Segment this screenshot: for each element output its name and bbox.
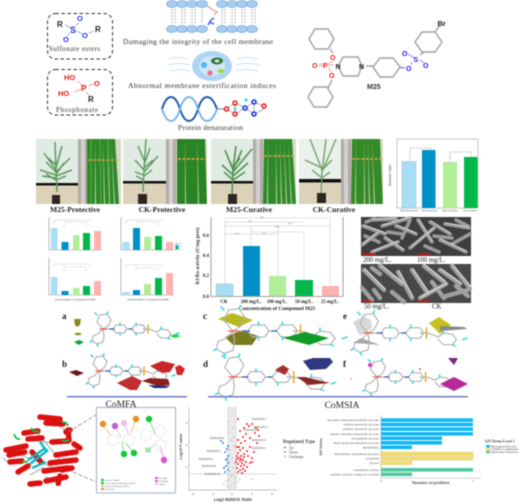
axis tick labels: 50 mg/L. xyxy=(295,300,313,305)
phosphonate box: R xyxy=(88,95,94,104)
bar chart: curative enzyme activity: *** xyxy=(287,222,293,226)
sulfonate esters box: O xyxy=(63,35,69,44)
bar chart: disease index: M25-Curative xyxy=(442,210,459,212)
protein labels: RAPGEFL10 xyxy=(205,473,221,476)
GO legend xyxy=(485,440,519,454)
axis labels: 6 xyxy=(186,421,188,425)
interaction legend: Conventional Hydrogen Bond xyxy=(105,482,136,485)
axis tick labels xyxy=(220,300,339,305)
interaction legend: Alkyl xyxy=(159,483,165,486)
axis tick labels: 25 mg/L. xyxy=(321,300,339,305)
sulfonate esters box xyxy=(48,14,112,59)
x axis title: Concentration of Compound M25 xyxy=(239,306,316,312)
panel: M25-Curative photos xyxy=(211,139,296,204)
protein labels: RAPGEFL8 xyxy=(199,458,213,461)
interaction legend xyxy=(101,477,169,491)
chemical structure: M25: O xyxy=(330,55,336,62)
protein labels: RAPGEFL1 xyxy=(252,418,266,421)
DNA and protein illustration xyxy=(162,97,266,121)
bar chart: disease index: CK-Curative xyxy=(463,210,478,212)
bar chart: curative enzyme activity: 0.2 xyxy=(203,274,210,279)
panel: CoMSIA field f xyxy=(343,358,468,395)
GO legend: Cellular Component xyxy=(491,447,519,451)
leaf photo xyxy=(166,139,207,204)
protein labels: RAPGEFL9 xyxy=(202,465,216,468)
chemical structure: M25: N xyxy=(359,64,364,71)
cellular component bars xyxy=(381,452,473,465)
label: cell membrane: Damaging the integrity of the cell membrane xyxy=(123,37,274,46)
chemical structure: M25: N xyxy=(336,64,341,71)
panel: CoMSIA field d xyxy=(203,354,336,400)
bar chart: enzyme activity 1 xyxy=(49,217,102,250)
label c: c xyxy=(203,311,207,321)
term labels: catalytic activity, acting on a protein xyxy=(330,472,379,477)
divider: CoMFA xyxy=(67,396,187,398)
term labels: organic substance metabolic process xyxy=(330,432,380,436)
bar chart: enzyme activity 2 xyxy=(121,217,181,250)
bar chart: curative enzyme activity xyxy=(196,215,343,312)
plant photo xyxy=(36,139,78,204)
volcano plot: Log2 M25/CK Ratio xyxy=(214,497,253,502)
caption: CK-Curative xyxy=(313,205,356,214)
bar chart: curative enzyme activity: *** xyxy=(234,232,240,236)
interaction legend: Carbon Hydrogen Bond xyxy=(105,485,130,488)
heading: CoMSIA: CoMSIA xyxy=(325,401,360,411)
axis labels: 0 xyxy=(231,492,233,496)
chemical structure: M25: Br xyxy=(438,19,446,28)
term labels: methylation xyxy=(363,445,379,449)
bar chart: curative enzyme activity: ns xyxy=(248,219,252,223)
protein labels: RAPGEFL7 xyxy=(207,450,221,453)
volcano legend: Unchange xyxy=(289,455,304,459)
GO enrichment bar chart: Number of proteins xyxy=(413,480,450,485)
bar chart: curative enzyme activity: 0.4 xyxy=(203,254,210,259)
caption: CK-Protective xyxy=(139,205,186,214)
label: protein denaturation: Protein denaturation xyxy=(178,123,243,132)
leaf photo xyxy=(78,139,121,204)
axis labels: 3 xyxy=(251,492,253,496)
volcano plot xyxy=(179,407,315,502)
membrane illustration xyxy=(166,0,258,33)
term labels: small molecule metabolic process xyxy=(333,441,380,445)
SEM bottom row xyxy=(361,264,471,303)
bar chart: curative enzyme activity: *** xyxy=(274,225,280,229)
term labels: intracellular anatomical structure xyxy=(334,452,379,456)
protein labels: RAPGEFL5 xyxy=(252,447,266,450)
bar chart: enzyme activity 3 xyxy=(49,258,102,302)
panel: CoMSIA field e xyxy=(343,311,467,355)
protein labels xyxy=(199,418,268,476)
chemical structure: M25 xyxy=(308,19,446,107)
label e: e xyxy=(343,311,347,321)
divider: CoMSIA xyxy=(208,396,468,398)
GO axis labels: 0 xyxy=(380,479,382,483)
GO legend: GO Terms Level 1 xyxy=(485,440,515,444)
axis labels: 4 xyxy=(186,443,188,447)
term labels: cytosol xyxy=(369,461,379,465)
GO axis labels xyxy=(380,479,474,483)
bar chart: disease index: Disease index xyxy=(388,164,392,186)
panel: M25-Protective photos xyxy=(36,139,121,204)
volcano legend: Up xyxy=(289,446,294,450)
plant photo xyxy=(211,139,253,204)
downregulated points xyxy=(221,441,228,472)
bar chart: enzyme activity 4 xyxy=(121,258,174,302)
panel: CK-Protective photos xyxy=(123,139,207,204)
label d: d xyxy=(203,359,208,369)
biological process bars xyxy=(381,418,473,449)
bar chart: disease index: CK-Protective xyxy=(421,210,438,212)
SEM top row xyxy=(361,217,471,256)
axis labels: -6 xyxy=(192,492,195,496)
SEM label 100: 100 mg/L. xyxy=(417,257,446,264)
term labels xyxy=(327,418,380,477)
sulfonate esters box: R xyxy=(95,25,101,34)
panel: CoMSIA field c xyxy=(203,306,347,356)
upregulated points xyxy=(236,419,259,473)
bar chart: disease index xyxy=(388,139,478,212)
heading: CoMFA: CoMFA xyxy=(106,400,137,410)
leaf photo xyxy=(341,139,383,204)
SEM label CK: CK xyxy=(432,304,442,310)
bar chart: enzyme activity 4: Concentration of Compound M25 xyxy=(127,298,169,302)
phosphonate box: HO xyxy=(58,89,69,98)
bar chart: curative enzyme activity: 0.0 xyxy=(203,295,210,300)
protein labels: RAPGEFL6 xyxy=(210,437,224,440)
protein labels: RAPGEFL4 xyxy=(252,439,266,442)
GO legend: Biological Process xyxy=(491,444,517,448)
label a: a xyxy=(62,311,67,321)
GO axis labels: 2 xyxy=(441,479,443,483)
interaction legend: van der Waals xyxy=(105,479,119,482)
volcano legend: Down xyxy=(289,450,298,454)
chemical structure: M25: O xyxy=(406,66,412,73)
axis labels xyxy=(186,421,273,496)
interaction legend: Pi-Alkyl xyxy=(159,477,168,480)
chemical structure: M25: O xyxy=(423,63,429,70)
panel: CoMFA steric field a xyxy=(62,311,181,346)
interaction legend: Pi-Sigma xyxy=(159,480,169,483)
label b: b xyxy=(62,359,67,369)
SEM label 200: 200 mg/L. xyxy=(363,257,392,264)
axis tick labels: CK xyxy=(220,300,228,305)
axis labels: 6 xyxy=(271,492,273,496)
GO enrichment bar chart: GO terms xyxy=(319,438,323,456)
bar chart: curative enzyme activity: *** xyxy=(261,232,267,236)
axis labels: 2 xyxy=(186,465,188,469)
axis labels: -3 xyxy=(212,492,215,496)
chemical structure: M25: P xyxy=(323,63,328,70)
GO enrichment bar chart xyxy=(319,415,519,485)
panel: SEM micrographs xyxy=(361,217,471,310)
compound name: M25 xyxy=(367,84,381,91)
protein labels: RAPGEFL2 xyxy=(254,426,268,429)
axis tick labels: 100 mg/L. xyxy=(267,300,287,305)
leaf photo xyxy=(253,139,296,204)
sulfonate esters box: O xyxy=(77,14,83,23)
plant photo xyxy=(123,139,166,204)
small legend xyxy=(175,243,181,250)
interaction legend: Pi-Cation xyxy=(105,488,115,491)
term labels: transferase activity xyxy=(353,468,379,472)
y axis title: KI/Ra activity (U/mg prot) xyxy=(196,227,201,284)
zoom callout lines xyxy=(68,415,96,482)
GO axis labels: 3 xyxy=(472,479,474,483)
cell illustration xyxy=(168,51,260,81)
protein labels: RAPGEFL3 xyxy=(244,429,258,432)
axis tick labels: 200 mg/L. xyxy=(241,300,261,305)
chemical structure: M25: O xyxy=(329,73,335,80)
unchanged points xyxy=(224,416,252,486)
caption: M25-Curative xyxy=(226,205,273,214)
protein structure xyxy=(3,417,80,484)
plant photo xyxy=(299,139,341,204)
sulfonate esters box: Sulfonate esters xyxy=(49,45,100,53)
volcano legend xyxy=(283,440,315,459)
caption: M25-Protective xyxy=(50,205,101,214)
phosphonate box xyxy=(48,70,112,115)
volcano plot: -Log10 P-value xyxy=(179,433,183,461)
chemical structure: M25: O xyxy=(402,51,408,58)
sulfonate esters box: O xyxy=(82,31,88,40)
phosphonate box: P xyxy=(81,83,87,93)
label: esterification: Abnormal membrane esterification induces xyxy=(128,81,276,90)
phosphonate box: O xyxy=(94,79,100,88)
volcano legend: Regulated Type xyxy=(283,440,315,445)
panel: CoMFA electrostatic field b xyxy=(62,354,185,390)
bar chart: curative enzyme activity: 0.6 xyxy=(203,234,210,239)
panel: CK-Curative photos xyxy=(299,139,383,204)
panel: chemical classes xyxy=(48,14,112,115)
term labels: primary metabolic process xyxy=(343,427,380,431)
SEM label 50: 50 mg/L. xyxy=(364,304,389,310)
label f: f xyxy=(343,359,347,369)
term labels: biosynthetic process xyxy=(351,436,380,440)
term labels: nitrogen compound metabolic process xyxy=(327,418,380,422)
bars xyxy=(216,246,339,296)
molecular function bars xyxy=(381,468,473,476)
term labels: cellular metabolic process xyxy=(344,423,380,427)
GO legend: Molecular Function xyxy=(491,450,518,454)
bar chart: disease index: M25-Protective xyxy=(400,210,419,212)
bar chart: enzyme activity 3: Concentration of Compound M25 xyxy=(54,298,96,302)
chemical structure: M25: S xyxy=(414,57,418,64)
sulfonate esters box: S xyxy=(70,25,76,35)
term labels: cytoplasm xyxy=(365,456,379,460)
chemical structure: M25: O xyxy=(312,63,318,70)
phosphonate box: Phosphonate xyxy=(56,106,98,114)
sulfonate esters box: R xyxy=(57,20,63,29)
bar chart: curative enzyme activity: ns xyxy=(260,215,264,219)
phosphonate box: HO xyxy=(64,73,75,82)
ligand interaction map xyxy=(96,408,176,493)
panel: mechanisms of action xyxy=(123,0,276,132)
GO axis labels: 1 xyxy=(411,479,413,483)
